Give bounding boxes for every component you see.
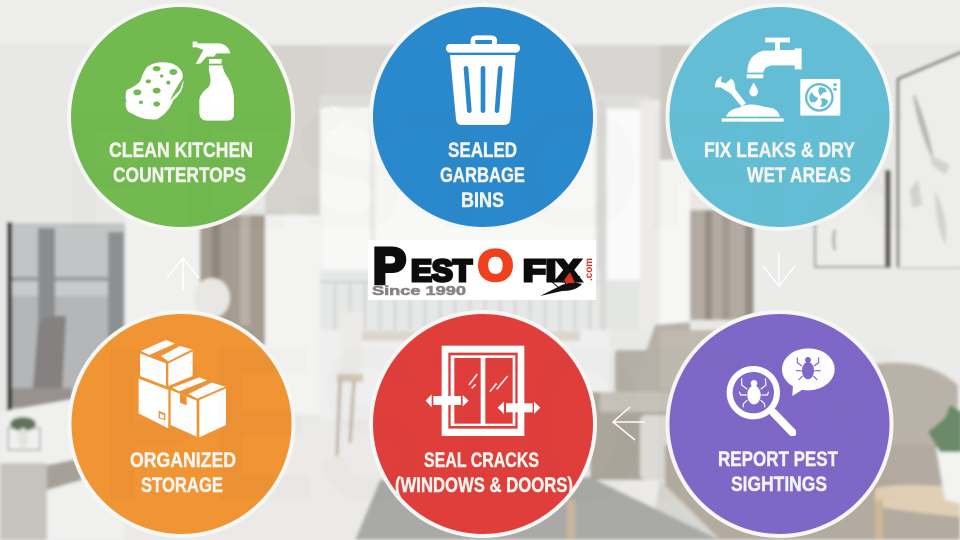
label: fix leaks and dry wet areas: FIX LEAKS & DRY [704,139,855,162]
logo: Pestofix since 1990 [368,238,596,300]
icon: ventilation fan [800,79,840,116]
dining table and chair [355,331,580,341]
label: clean kitchen countertops: CLEAN KITCHEN [109,139,253,162]
label: sealed garbage bins [440,139,525,212]
sofa [590,392,770,480]
label: seal cracks windows and doors [395,449,573,497]
label: clean kitchen countertops [109,139,253,187]
cabinet [0,390,125,540]
icon: sponge [126,62,183,120]
side table and plant [875,485,960,517]
panel: fix leaks and dry wet areas [668,5,892,229]
wall and frames [755,210,960,420]
label: sealed garbage bins: GARBAGE [440,164,525,187]
label: sealed garbage bins: BINS [461,189,504,212]
icon: wrench and puddle [715,76,784,122]
arrow: up to clean kitchen [167,258,199,291]
logo tagline: Since 1990 [372,283,466,298]
logo cockroach [540,272,582,296]
panel: sealed garbage bins [371,5,595,229]
label: seal cracks windows and doors: SEAL CRACKS [424,449,539,472]
label: sealed garbage bins: SEALED [448,139,517,162]
faint top connector arrow [332,106,349,135]
icon: stacked boxes [139,340,226,437]
logo wordmark [373,238,581,294]
panel: organized storage [70,312,294,536]
logo wordmark: EST [411,253,472,288]
label: organized storage: ORGANIZED [130,449,236,472]
label: seal cracks windows and doors: (WINDOWS & DOORS) [395,474,573,497]
label: organized storage: STORAGE [141,474,223,497]
icon: spray bottle [193,42,234,121]
label: fix leaks and dry wet areas [704,139,855,187]
icon: dripping faucet [747,38,802,96]
icon: trash bin [446,35,520,125]
icon: speech bubble with bug [782,348,835,396]
arrow: down to report sightings [763,253,795,286]
label: fix leaks and dry wet areas: WET AREAS [747,164,851,187]
icon: magnifier with bug [730,369,793,433]
label: clean kitchen countertops: COUNTERTOPS [113,164,246,187]
label: report pest sightings: SIGHTINGS [731,473,827,496]
logo wordmark: P [373,238,406,294]
label: report pest sightings: REPORT PEST [718,448,838,471]
logo dot com: .com [584,258,595,281]
label: report pest sightings [718,448,838,496]
arrow: left to seal cracks [613,407,645,440]
panel: report pest sightings [668,312,892,536]
panel: clean kitchen countertops [69,5,293,229]
logo wordmark: FIX [523,253,581,288]
icon: window with sealing arrows [426,346,540,436]
watermark: faint brand lettering [60,75,910,540]
panel: seal cracks [371,312,595,536]
label: organized storage [130,449,236,497]
logo wordmark: O [478,242,513,290]
TV [8,223,125,411]
rug and table legs [355,477,720,540]
